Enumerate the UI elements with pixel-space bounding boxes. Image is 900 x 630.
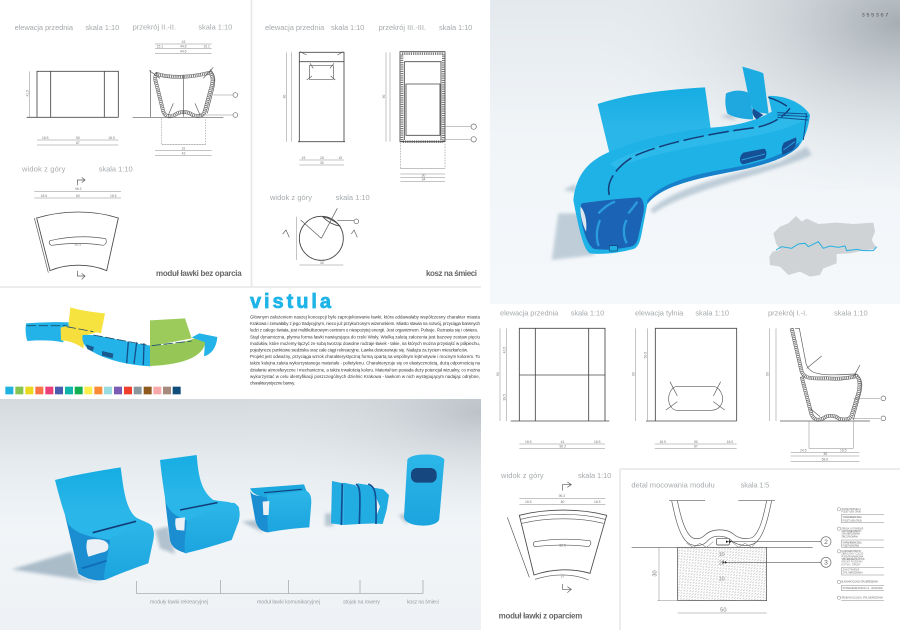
drawing: section II: 31 bbox=[182, 147, 186, 151]
drawing: section III: 34 bbox=[422, 178, 426, 182]
legend: material notes: STAL CYNKOWANA bbox=[841, 535, 858, 538]
heading: front elevation: elewacja przednia bbox=[500, 308, 559, 317]
module: recreational bench with large backrest bbox=[12, 467, 154, 583]
heading: front elevation: skala 1:10 bbox=[571, 308, 604, 317]
heading: top view bbox=[269, 193, 370, 202]
drawing: mounting detail: 10 bbox=[719, 552, 725, 558]
bench: blue left module bbox=[26, 322, 72, 342]
drawing: mounting detail: 2 bbox=[824, 539, 828, 546]
annotation: module bracket bbox=[136, 580, 423, 594]
bench: blue right module bbox=[192, 333, 217, 356]
bench: blue center module bbox=[82, 335, 151, 366]
heading: top view: skala 1:10 bbox=[336, 193, 370, 202]
heading: section II: skala 1:10 bbox=[198, 22, 232, 31]
heading: front elevation bbox=[15, 23, 119, 32]
text block: description: Głównym założeniem naszej koncepcji było zaprojektowanie ławki, która oddawałaby współczesny charakter miasta bbox=[250, 314, 481, 320]
drawing: front elevation bbox=[496, 328, 609, 448]
drawing: front elevation: 90 bbox=[496, 372, 500, 376]
drawing: mounting detail bbox=[632, 501, 831, 613]
legend: material notes: ŚRUBA MOCUJĄCA, STAL NIERDZEWNA bbox=[841, 597, 883, 600]
title: vistula bbox=[250, 291, 332, 313]
legend: material notes: BLACHA MOCUJĄCA, STAL NIERDZEWNA bbox=[841, 581, 878, 584]
heading: rear elevation bbox=[635, 308, 729, 317]
legend: material notes: POLIETYLEN, GRUB. bbox=[843, 520, 862, 522]
drawing: rear elevation: 90 bbox=[632, 372, 636, 376]
annotation: module labels: kosz na śmieci bbox=[407, 600, 439, 606]
drawing: front elevation bbox=[25, 71, 118, 145]
panel: colored bench render bbox=[5, 307, 217, 394]
heading: front elevation: skala 1:10 bbox=[331, 23, 364, 32]
heading: front elevation bbox=[500, 308, 604, 317]
drawing: rear elevation: 50.5 bbox=[643, 352, 647, 358]
annotation: module labels bbox=[150, 600, 439, 606]
drawing: mounting detail: 50 bbox=[720, 607, 726, 613]
drawing: top view: 96.3 bbox=[559, 494, 565, 498]
drawing: top view: 18.5 bbox=[41, 194, 47, 198]
drawing: section II: 44.6 bbox=[180, 50, 187, 54]
drawing: top view: 30 bbox=[320, 261, 324, 265]
text block: description bbox=[250, 314, 481, 386]
legend: material notes: POLIETYLEN, GRUB. bbox=[843, 545, 860, 547]
drawing: section I: 16.5 bbox=[840, 448, 847, 452]
heading: front elevation: skala 1:10 bbox=[85, 23, 119, 32]
bench strap grooves bbox=[777, 113, 808, 140]
legend: material notes: ZBROJONY C20/25 bbox=[841, 554, 864, 556]
legend: material notes: STAL NIERDZEWNA bbox=[841, 533, 860, 536]
module: waste bin bbox=[398, 454, 444, 526]
legend: material notes: ŚCIANKI MODUŁU 2: bbox=[841, 508, 862, 511]
text block: description: wykorzystać w celu identyfikacji poszczególnych dzielnic Krakowa - ławkom w nich występującym nadając odrębne, bbox=[250, 374, 480, 379]
drawing: front elevation: 39.5 bbox=[503, 394, 507, 401]
module: communication bench bbox=[242, 484, 311, 533]
drawing: front elevation: 30 bbox=[320, 161, 324, 165]
annotation: module labels: stojak na rowery bbox=[343, 600, 380, 606]
heading: section II: przekrój II.-II. bbox=[133, 22, 176, 31]
drawing: top view: 60 bbox=[561, 500, 565, 504]
legend: material notes: FUNDAMENT BETON bbox=[841, 550, 862, 553]
text block: description: Stąd dynamiczna, płynna forma ławki nawiązująca do rzeki Wisły. Wielką zaletą założenia jest bazowy zestaw pięciu bbox=[250, 334, 481, 339]
heading: mounting detail bbox=[631, 480, 769, 489]
drawing: section II: 15.1 bbox=[203, 45, 210, 49]
text block: description: Projekt jest odważny, przyciąga wzrok charakterystyczną formą opartą na wspólnym lejtmotywie i mocnym kolorem. To bbox=[250, 354, 481, 359]
drawing: section III bbox=[382, 52, 476, 182]
legend: material notes: STAL NIERDZEWNA bbox=[843, 572, 863, 575]
heading: top view: widok z góry bbox=[269, 193, 312, 202]
bench shadow bbox=[552, 113, 812, 260]
text block: description: także kolejna zaleta wykorzystanego materiału - polietylenu. Charakteryzuje się on elastycznością, dużą odpornością na bbox=[250, 361, 481, 366]
module: recreational bench with narrow backrest bbox=[155, 455, 240, 554]
drawing: top view: 37 bbox=[561, 574, 565, 578]
drawing: rear elevation: 18.5 bbox=[659, 440, 666, 444]
module: bicycle stand bbox=[325, 481, 389, 526]
drawing: section I: 90 bbox=[765, 372, 769, 376]
map of Kraków bbox=[769, 216, 877, 277]
drawing: rear elevation bbox=[632, 328, 737, 448]
panel: main bench render bbox=[490, 0, 900, 304]
bench side openings bbox=[740, 137, 796, 164]
drawing: front elevation: 28 bbox=[320, 156, 324, 160]
heading: section I bbox=[768, 308, 868, 317]
legend: material notes: ŚRUBA, KOTWIENIE bbox=[841, 527, 864, 530]
drawing: top view: 60 bbox=[76, 194, 80, 198]
drawing: top view bbox=[34, 177, 121, 279]
drawing: top view: 96.3 bbox=[75, 187, 82, 191]
text block: description: Krakowa i zerwałaby z jego tradycyjnym, nieco już przykurzonym wizerunkiem. Miasto stawia na rozwój, przyciąga barwnych bbox=[250, 321, 481, 326]
panel: top view and mounting detail bbox=[499, 471, 884, 620]
heading: section III: skala 1:10 bbox=[439, 23, 472, 32]
heading: section I: skala 1:10 bbox=[834, 308, 868, 317]
drawing: section III: 90 bbox=[382, 94, 386, 98]
heading: section I: przekrój I.-I. bbox=[768, 308, 807, 317]
legend: material notes: ZAKOTWIENIE bbox=[843, 569, 860, 572]
legend: material notes: GRUNT RODZIMY bbox=[841, 562, 863, 564]
drawing: section II: 43 bbox=[182, 152, 186, 156]
drawing: front elevation: 15 bbox=[302, 156, 306, 160]
drawing: top view: 62.5 bbox=[75, 242, 81, 246]
heading: top view: skala 1:10 bbox=[99, 165, 133, 174]
label: waste bin: kosz na śmieci bbox=[426, 269, 477, 278]
drawing: front elevation bbox=[283, 52, 345, 165]
label: module without backrest: moduł ławki bez oparcia bbox=[156, 269, 242, 278]
heading: top view bbox=[21, 165, 133, 174]
panel: waste bin bbox=[265, 23, 477, 278]
drawing: section I: 58.6 bbox=[822, 457, 828, 461]
bench body bbox=[573, 96, 810, 254]
text block: description: modułów, które możemy łączyć ze sobą tworząc dowolne rodzaje ławek - takie, na których można przysiąść w półpiechu, bbox=[250, 341, 480, 346]
small bench module with backrest bbox=[725, 67, 769, 119]
drawing: top view: 18.5 bbox=[525, 500, 532, 504]
legend: material notes: WYPEŁNIENIE MODUŁU bbox=[843, 542, 862, 544]
text block: description: ludzi z całego świata, jest multikulturowym centrum o niespożytej energii. Jest organizmem. Pulsuje. Rozrasta się i otwiera. bbox=[250, 328, 478, 333]
drawing: top view: 18.5 bbox=[594, 500, 601, 504]
bench: green module bbox=[150, 318, 206, 366]
drawing: section I: 38 bbox=[823, 452, 827, 456]
bench backrest bbox=[598, 87, 711, 153]
drawing: mounting detail: 20 bbox=[719, 561, 725, 567]
bench ridge highlight bbox=[610, 112, 805, 168]
drawing: front elevation: 18.5 bbox=[594, 440, 601, 444]
heading: top view: skala 1:10 bbox=[578, 471, 611, 480]
heading: mounting detail: skala 1:5 bbox=[741, 480, 769, 489]
drawing: mounting detail: 30 bbox=[653, 570, 659, 577]
drawing: section II: 43 bbox=[182, 40, 186, 44]
drawing: rear elevation: 87 bbox=[694, 444, 698, 448]
text block: description: działanie atmosferyczne i mechaniczne, a także trwałością koloru. Materiał ten posiada duży potencjał wizualny, co można bbox=[250, 367, 481, 372]
legend: material notes: POLIETYLEN, GRUB. bbox=[841, 512, 862, 514]
color swatches bbox=[5, 387, 181, 394]
drawing: top view bbox=[283, 208, 359, 265]
drawing: mounting detail: 3 bbox=[824, 560, 828, 567]
drawing: front elevation: 87 bbox=[76, 141, 80, 145]
heading: rear elevation: elewacja tylnia bbox=[635, 308, 684, 317]
legend: material notes bbox=[837, 508, 884, 601]
drawing: rear elevation: 50 bbox=[694, 440, 698, 444]
legend: material notes: WYPEŁNIENIE MODUŁU 2 - UKŁADANE bbox=[843, 587, 883, 590]
drawing: front elevation: 90 bbox=[283, 94, 287, 98]
panel: module without backrest bbox=[15, 22, 242, 279]
bench slots bbox=[609, 97, 790, 195]
text block: description: charakterystyczne barwy. bbox=[250, 380, 295, 386]
legend: material notes: KOTWY, ŚRUBY bbox=[841, 563, 861, 566]
annotation: module labels: moduł ławki komunikacyjnej bbox=[257, 600, 320, 606]
drawing: section II bbox=[133, 40, 238, 156]
annotation: module labels: moduły ławki rekreacyjnej bbox=[150, 600, 208, 606]
heading: front elevation bbox=[265, 23, 364, 32]
heading: section III bbox=[379, 23, 472, 32]
heading: mounting detail: detal mocowania modułu bbox=[631, 480, 715, 489]
bench underside bbox=[647, 142, 800, 204]
bench end opening bbox=[580, 197, 644, 251]
heading: front elevation: elewacja przednia bbox=[265, 23, 325, 32]
project number: 355367 bbox=[862, 12, 888, 18]
heading: front elevation: elewacja przednia bbox=[15, 23, 74, 32]
drawing: section I bbox=[765, 328, 886, 461]
drawing: rear elevation: 18.5 bbox=[727, 440, 733, 444]
legend: material notes: WYPEŁNIENIE MODUŁU bbox=[843, 517, 862, 519]
bench: yellow module bbox=[61, 307, 105, 348]
drawing: section I: 24.5 bbox=[800, 448, 807, 452]
text block: description: pojedyncze punktowe siedziska oraz całe ciągi rekreacyjne. Ławka dostosowuje się. Nadąża za życiem mieszkańców. bbox=[250, 348, 468, 352]
heading: top view: widok z góry bbox=[21, 165, 66, 174]
drawing: front elevation: 96.3 bbox=[559, 444, 566, 448]
drawing: mounting detail: 10 bbox=[719, 576, 725, 582]
drawing: front elevation: 15 bbox=[338, 156, 342, 160]
drawing: section II: 44.6 bbox=[180, 45, 187, 49]
drawing: top view bbox=[507, 482, 607, 593]
drawing: front elevation: 41 bbox=[561, 440, 565, 444]
legend: material notes: MOCOWANIE W BETON bbox=[841, 530, 862, 533]
panel: bench modules render bbox=[0, 399, 481, 630]
drawing: front elevation: 41.5 bbox=[25, 90, 29, 97]
drawing: section II: 15.1 bbox=[157, 45, 163, 49]
heading: section II bbox=[133, 22, 232, 31]
heading: top view: widok z góry bbox=[500, 471, 544, 480]
heading: section III: przekrój III.-III. bbox=[379, 23, 426, 32]
heading: top view bbox=[500, 471, 611, 480]
drawing: top view: 52.5 bbox=[559, 544, 566, 548]
legend: material notes: PODSYPKA PIASKOWA bbox=[841, 555, 864, 558]
drawing: front elevation: 18.5 bbox=[108, 136, 115, 140]
drawing: front elevation: 50 bbox=[76, 136, 80, 140]
drawing: section III: 30 bbox=[422, 174, 426, 178]
panel: module with backrest, elevations bbox=[496, 308, 886, 461]
drawing: front elevation: 18.5 bbox=[525, 440, 532, 444]
drawing: front elevation: 18.5 bbox=[42, 136, 49, 140]
drawing: top view: 18.5 bbox=[110, 194, 117, 198]
heading: rear elevation: skala 1:10 bbox=[695, 308, 729, 317]
legend: material notes: STAL NIERDZEWNA, OCYNK bbox=[841, 558, 865, 561]
label: module with backrest: moduł ławki z oparciem bbox=[499, 611, 582, 620]
drawing: front elevation: 40.5 bbox=[503, 347, 507, 353]
